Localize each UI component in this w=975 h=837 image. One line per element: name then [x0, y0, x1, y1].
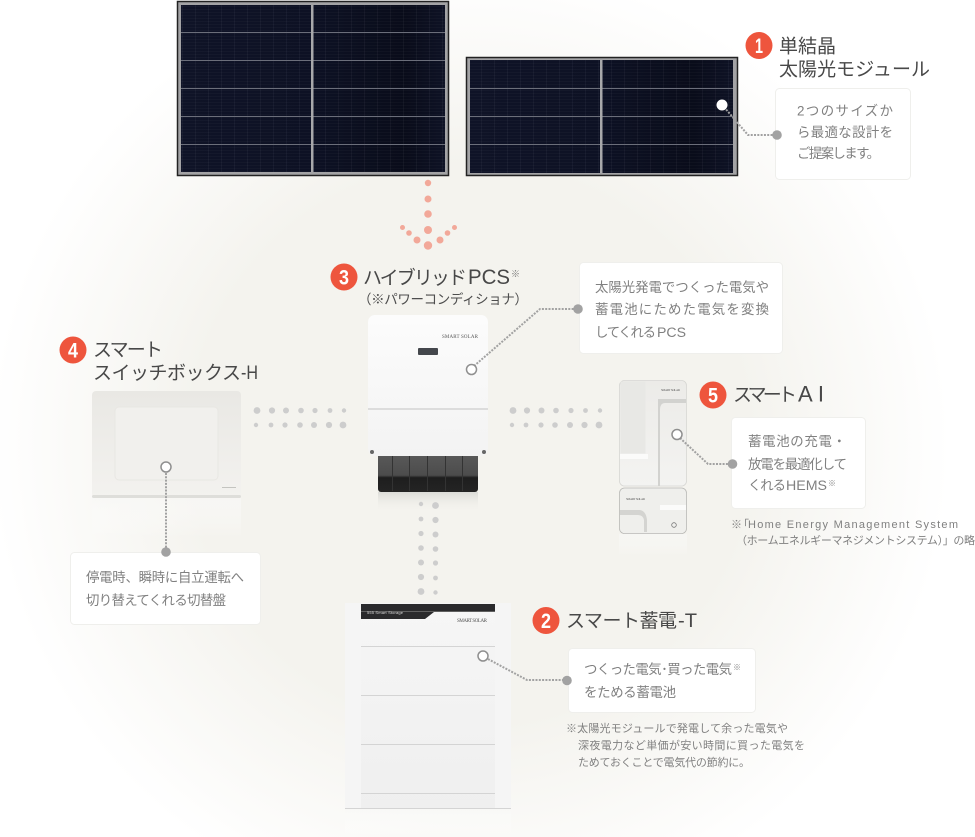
heading 1: module: 単結晶: [779, 36, 836, 58]
heading 5: smart AI: [700, 382, 824, 408]
heading 3: PCS: ※: [511, 269, 520, 279]
note: HEMS: Home Energy Management System: [748, 519, 958, 531]
product: smart AI: SMART SOLAR: [661, 388, 680, 392]
callout 2: battery description: [568, 648, 756, 712]
connector: switch box to PCS: [254, 407, 346, 428]
callout 1: module description: [776, 88, 910, 180]
heading 3: PCS: （※パワーコンディショナ）: [358, 291, 528, 307]
arrow: power flow from panels to PCS: [400, 180, 457, 250]
callout 5: smart AI description: 蓄電池の充電・: [748, 434, 846, 449]
heading 2: battery: [532, 607, 697, 634]
callout 5: smart AI description: [732, 418, 866, 508]
product: switch box: [92, 391, 241, 538]
leader 5: [672, 430, 737, 469]
heading 3: PCS: ハイブリッド: [363, 266, 467, 289]
heading 4: switch box: [60, 336, 258, 384]
heading 3: PCS: [330, 264, 528, 307]
callout 1: module description: 2つのサイズか: [797, 104, 893, 118]
leader 4: [161, 462, 171, 557]
callout 1: module description: ご提案します。: [797, 146, 880, 161]
callout 2: battery description: をためる蓄電池: [584, 685, 676, 700]
heading 2: battery: スマート蓄電: [566, 610, 677, 632]
product: smart AI: SMART SOLAR: [626, 497, 645, 501]
note: HEMS: （ホームエネルギーマネジメントシステム）」の略: [736, 533, 975, 547]
note: battery: 深夜電力など単価が安い時間に買った電気を: [578, 738, 805, 752]
heading 5: smart AI: 5: [708, 384, 718, 408]
callout 5: smart AI description: ※: [828, 479, 836, 488]
heading 1: module: 太陽光モジュール: [779, 58, 930, 80]
callout 4: switch box description: [70, 552, 260, 624]
note: HEMS: [731, 518, 975, 547]
note: battery: ためておくことで電気代の節約に。: [578, 755, 750, 769]
product: hybrid PCS: [368, 315, 488, 512]
product: smart battery: 555 Smart Storage: [367, 610, 404, 615]
callout 4: switch box description: 停電時、瞬時に自立運転へ: [86, 570, 244, 585]
heading 2: battery: -T: [678, 611, 697, 632]
callout 5: smart AI description: 放電を最適化して: [748, 457, 847, 472]
callout 1: module description: ら最適な設計を: [797, 125, 893, 140]
leader 3: [466, 304, 583, 374]
leader 1: [716, 100, 782, 140]
leader 2: [478, 651, 572, 685]
heading 4: switch box: -H: [241, 363, 258, 384]
callout 2: battery description: ※: [733, 663, 741, 672]
callout 5: smart AI description: くれる: [748, 478, 786, 493]
heading 2: battery: 2: [541, 610, 551, 633]
callout 3: PCS description: PCS: [657, 325, 686, 340]
note: HEMS: ※: [731, 519, 742, 531]
callout 3: PCS description: してくれる: [595, 325, 656, 340]
small solar panel: [466, 58, 738, 176]
product: smart battery: [345, 603, 511, 837]
note: battery: ※太陽光モジュールで発電して余った電気や: [566, 721, 788, 735]
heading 4: switch box: スマート: [93, 340, 163, 361]
product: hybrid PCS: SMART SOLAR: [442, 335, 479, 340]
note: HEMS: 「: [738, 518, 749, 531]
product: smart battery: SMART SOLAR: [457, 619, 488, 624]
callout 5: smart AI description: HEMS: [786, 478, 827, 493]
connector: PCS to smart AI: [510, 407, 602, 428]
product: smart AI: [619, 380, 687, 556]
callout 3: PCS description: 蓄電池にためた電気を変換: [595, 302, 769, 317]
heading 1: module: 1: [755, 35, 763, 58]
heading 5: smart AI: スマート: [733, 385, 797, 406]
callout 2: battery description: つくった電気･買った電気: [584, 662, 732, 677]
heading 4: switch box: スイッチボックス: [93, 362, 241, 384]
large solar panel: [178, 2, 448, 176]
heading 5: smart AI: AI: [798, 382, 824, 406]
callout 3: PCS description: [580, 262, 782, 354]
heading 3: PCS: 3: [339, 266, 349, 290]
heading 4: switch box: 4: [68, 340, 78, 362]
callout 3: PCS description: 太陽光発電でつくった電気や: [595, 280, 769, 295]
heading 1: module: [746, 32, 930, 80]
callout 4: switch box description: 切り替えてくれる切替盤: [86, 593, 226, 608]
connector: PCS to battery: [418, 502, 439, 595]
heading 3: PCS: PCS: [468, 266, 510, 289]
note: battery: [566, 721, 805, 769]
